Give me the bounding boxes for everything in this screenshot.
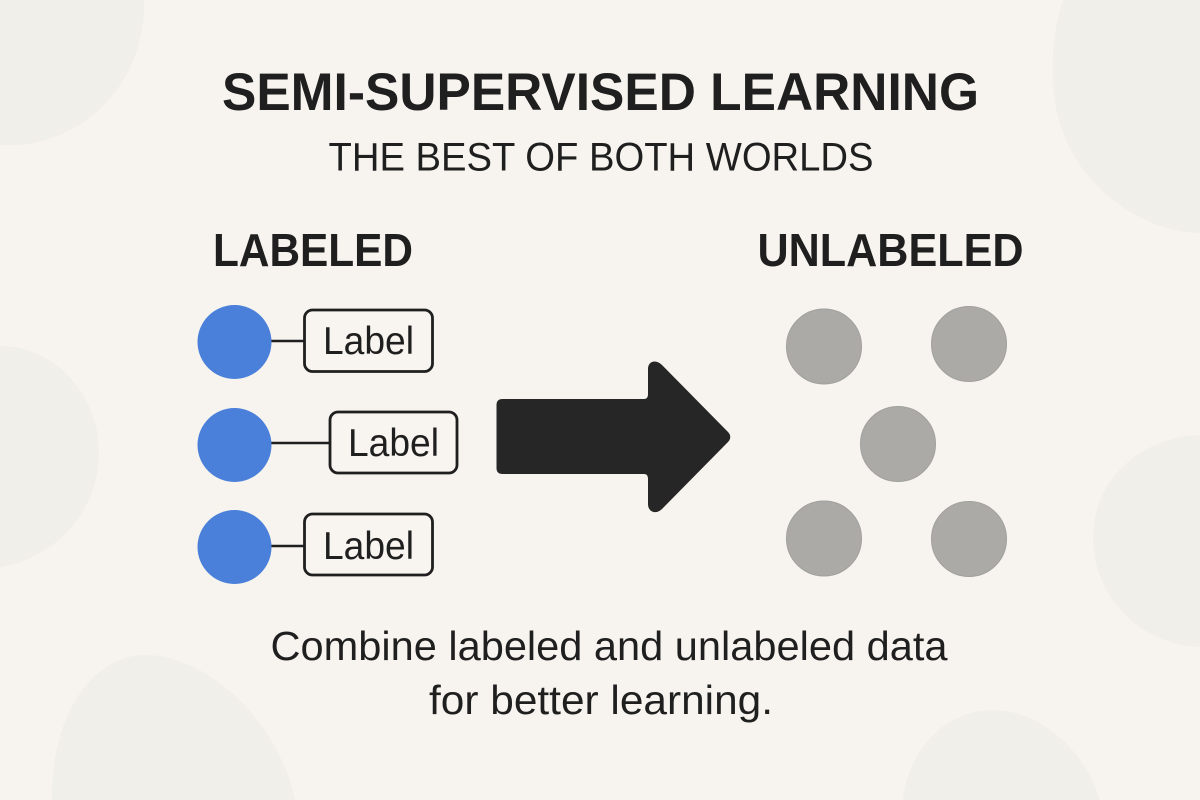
- unlabeled data points: [786, 306, 1006, 576]
- caption: for better learning.: [429, 677, 773, 723]
- heading: labeled: LABELED: [213, 224, 413, 276]
- labeled point 2: [198, 408, 457, 482]
- title: SEMI-SUPERVISED LEARNING: [222, 63, 979, 122]
- labeled point 2: Label: [348, 422, 439, 465]
- labeled data points: [198, 305, 457, 584]
- arrow: [496, 362, 730, 512]
- labeled point 3: Label: [323, 525, 414, 568]
- labeled point 1: Label: [323, 320, 414, 363]
- caption: [270, 623, 948, 723]
- labeled point 3: [198, 510, 432, 584]
- labeled point 1: [198, 305, 432, 379]
- subtitle: THE BEST OF BOTH WORLDS: [328, 136, 874, 180]
- heading: unlabeled: UNLABELED: [758, 224, 1024, 276]
- caption: Combine labeled and unlabeled data: [270, 623, 948, 669]
